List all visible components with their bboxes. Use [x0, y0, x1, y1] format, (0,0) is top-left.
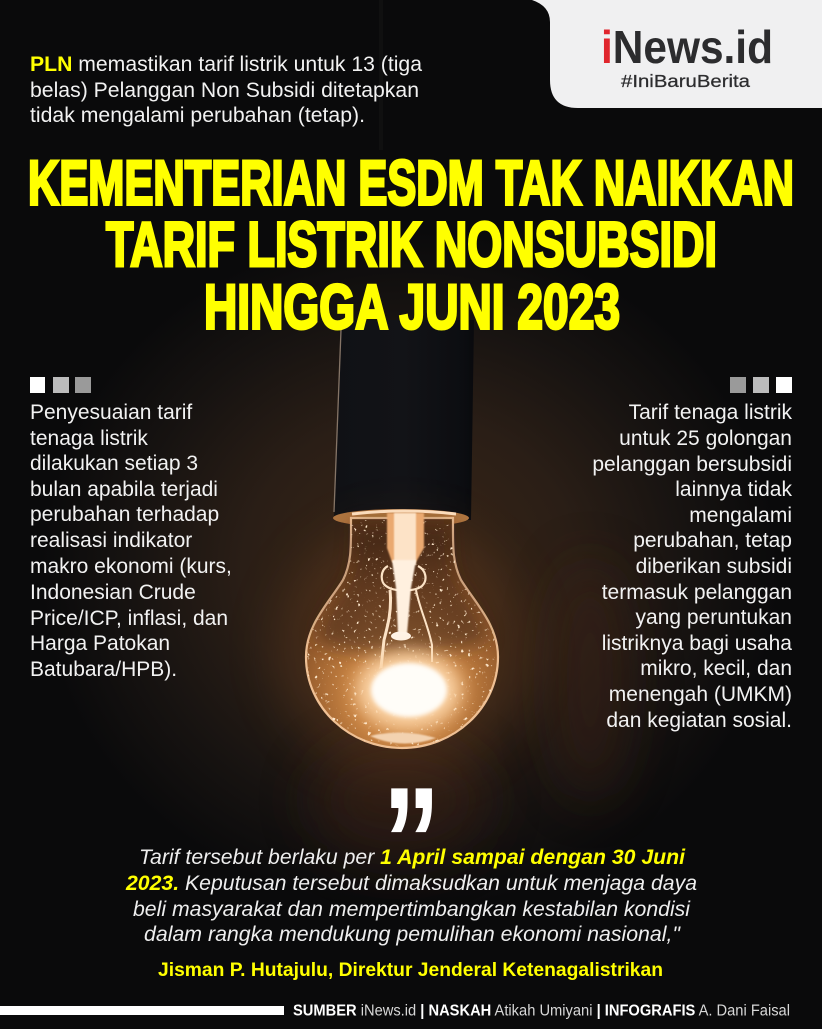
- intro text: belas) Pelanggan Non Subsidi ditetapkan: [30, 79, 419, 102]
- right text block: Tarif tenaga listrik: [629, 401, 792, 424]
- light bulb: [277, 509, 527, 775]
- left text block: Penyesuaian tarif: [30, 401, 192, 424]
- title: HINGGA JUNI 2023: [204, 272, 620, 342]
- left text block: bulan apabila terjadi: [30, 478, 218, 501]
- logo hashtag: #IniBaruBerita: [621, 71, 750, 91]
- quote attribution: Jisman P. Hutajulu, Direktur Jenderal Ketenagalistrikan: [158, 960, 663, 981]
- quote text: 2023. Keputusan tersebut dimaksudkan untuk menjaga daya: [125, 871, 697, 895]
- left text block: [30, 401, 232, 681]
- bulb glass: [306, 518, 498, 748]
- right text block: lainnya tidak: [675, 478, 792, 501]
- filament: [381, 513, 432, 668]
- right text block: listriknya bagi usaha: [602, 632, 792, 655]
- quote text: dalam rangka mendukung pemulihan ekonomi nasional,": [144, 922, 681, 946]
- left text block: Batubara/HPB).: [30, 658, 177, 681]
- right text block: untuk 25 golongan: [619, 427, 792, 450]
- right marker squares: [730, 377, 792, 393]
- right text block: termasuk pelanggan: [602, 581, 792, 604]
- quote text: [125, 845, 697, 946]
- intro text: tidak mengalami perubahan (tetap).: [30, 104, 365, 127]
- left text block: realisasi indikator: [30, 529, 192, 552]
- icon: quotation mark: ”: [382, 756, 441, 929]
- footer bar: [0, 1006, 284, 1015]
- right text block: dan kegiatan sosial.: [606, 709, 792, 732]
- quote text: Tarif tersebut berlaku per 1 April sampai dengan 30 Juni: [139, 845, 686, 869]
- quote text: beli masyarakat dan mempertimbangkan kestabilan kondisi: [133, 897, 691, 921]
- right text block: mengalami: [689, 504, 792, 527]
- right text block: diberikan subsidi: [636, 555, 792, 578]
- right text block: mikro, kecil, dan: [640, 657, 792, 680]
- title: [28, 148, 794, 342]
- left text block: tenaga listrik: [30, 427, 148, 450]
- intro text: [30, 53, 422, 127]
- right text block: yang peruntukan: [636, 606, 792, 629]
- intro text: PLN memastikan tarif listrik untuk 13 (tiga: [30, 53, 422, 76]
- right text block: [592, 401, 792, 732]
- logo panel: [532, 0, 822, 108]
- left text block: Indonesian Crude: [30, 581, 196, 604]
- dark upper glass: [316, 524, 488, 655]
- left text block: perubahan terhadap: [30, 503, 219, 526]
- right text block: menengah (UMKM): [609, 683, 792, 706]
- left text block: dilakukan setiap 3: [30, 452, 198, 475]
- bulb collar: [333, 509, 469, 527]
- logo wordmark: iNews.id: [601, 21, 773, 73]
- filament hot spot: [357, 652, 461, 744]
- left text block: makro ekonomi (kurs,: [30, 555, 232, 578]
- left marker squares: [30, 377, 91, 393]
- left text block: Price/ICP, inflasi, dan: [30, 607, 228, 630]
- right text block: pelanggan bersubsidi: [592, 453, 792, 476]
- speckles: [306, 518, 498, 748]
- right text block: perubahan, tetap: [633, 529, 792, 552]
- left text block: Harga Patokan: [30, 632, 170, 655]
- lamp fixture: [334, 0, 474, 520]
- footer credits: SUMBER iNews.id | NASKAH Atikah Umiyani | INFOGRAFIS A. Dani Faisal: [293, 1002, 790, 1020]
